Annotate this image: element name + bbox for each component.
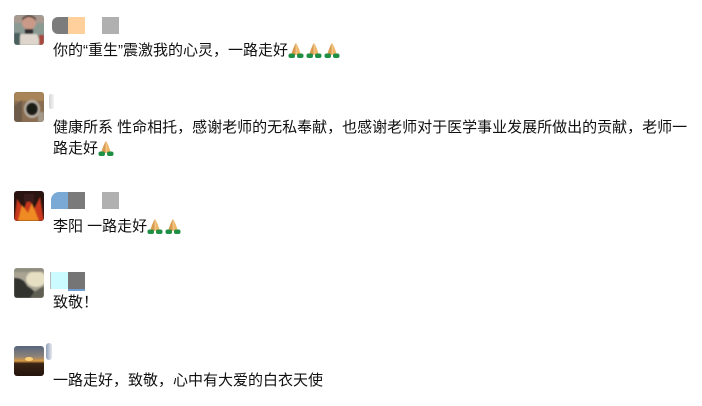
avatar: child portrait	[14, 15, 44, 45]
comment 5	[14, 343, 323, 389]
comment text: 一路走好，致敬，心中有大爱的白衣天使	[53, 372, 323, 389]
comment text: 你的“重生”震激我的心灵，一路走好	[53, 42, 288, 59]
comment text: 李阳 一路走好	[53, 218, 147, 235]
comment 2	[14, 92, 687, 157]
comment text: 致敬！	[53, 294, 98, 311]
blurred username	[52, 17, 119, 34]
comment 3	[14, 191, 180, 235]
avatar: sunset	[14, 346, 44, 376]
blurred username	[49, 94, 54, 109]
blurred username	[46, 343, 52, 360]
comment 1	[14, 15, 340, 59]
avatar: misty landscape	[14, 268, 44, 298]
avatar: animal close-up	[14, 92, 44, 122]
comment text: 健康所系 性命相托，感谢老师的无私奉献，也感谢老师对于医学事业发展所做出的贡献，老师一	[53, 119, 687, 136]
blurred username	[51, 192, 119, 209]
blurred username	[50, 272, 85, 291]
comment 4	[14, 268, 98, 311]
avatar: fiery illustration	[14, 191, 44, 221]
comment 2: 路走好	[53, 140, 98, 157]
